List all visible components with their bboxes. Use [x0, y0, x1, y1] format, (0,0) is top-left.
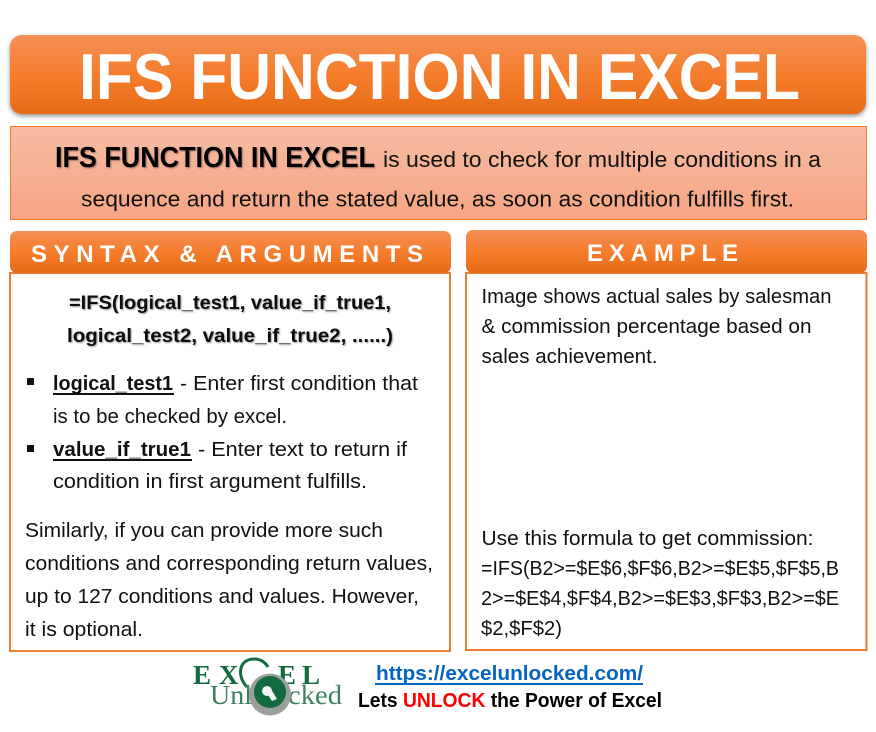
definition panel: is used to check for multiple conditions in a — [383, 147, 822, 172]
example formula text: $2,$F$2) — [481, 618, 562, 640]
title banner: IFS FUNCTION IN EXCEL — [79, 40, 800, 113]
argument bullet: value_if_true1: - Enter text to return if — [198, 439, 407, 461]
example heading — [466, 230, 867, 273]
logo: Excel Unlocked: Unl — [210, 680, 252, 710]
note text: Similarly, if you can provide more such — [25, 520, 383, 542]
argument bullet: logical_test1: logical_test1 — [53, 373, 173, 395]
example formula text: Use this formula to get commission: — [482, 528, 814, 550]
tagline: Lets UNLOCK the Power of Excel — [358, 690, 662, 712]
argument bullet: value_if_true1: condition in first argument fulfills. — [53, 471, 367, 493]
example heading: EXAMPLE — [587, 240, 738, 267]
argument bullet: logical_test1: is to be checked by excel. — [53, 406, 287, 428]
definition panel: sequence and return the stated value, as soon as condition fulfills first. — [81, 186, 794, 212]
definition panel: IFS FUNCTION IN EXCEL — [55, 142, 375, 174]
example intro text: & commission percentage based on — [482, 316, 812, 338]
example panel body — [466, 273, 866, 650]
syntax panel body — [10, 273, 450, 651]
syntax formula: =IFS(logical_test1, value_if_true1, — [69, 293, 391, 314]
logo: Excel Unlocked: cked — [288, 680, 343, 710]
logo: Excel Unlocked: X — [219, 660, 239, 690]
logo: Excel Unlocked: E — [278, 660, 296, 690]
argument bullet: logical_test1 — [27, 373, 418, 428]
syntax formula: logical_test2, value_if_true2, ......) — [67, 326, 393, 347]
note text: it is optional. — [25, 619, 143, 641]
syntax heading: SYNTAX & ARGUMENTS — [31, 241, 423, 268]
example intro text: sales achievement. — [482, 346, 658, 368]
example intro text — [482, 286, 832, 368]
argument bullet: logical_test1: - Enter first condition that — [180, 373, 418, 395]
note text — [25, 520, 433, 641]
syntax formula — [67, 293, 393, 347]
argument bullet: value_if_true1: value_if_true1 — [53, 439, 191, 461]
logo: Excel Unlocked: E — [193, 660, 211, 690]
example formula text: 2>=$E$4,$F$4,B2>=$E$3,$F$3,B2>=$E — [481, 588, 839, 610]
note text: up to 127 conditions and values. However, — [25, 586, 419, 608]
logo: Excel Unlocked: L — [302, 660, 320, 690]
example formula text — [481, 528, 839, 640]
argument bullet: value_if_true1 — [27, 439, 407, 493]
website link: https://excelunlocked.com/ — [376, 662, 643, 685]
definition panel — [10, 126, 866, 220]
panel: example — [466, 230, 867, 650]
panel: syntax and arguments — [10, 231, 451, 651]
note text: conditions and corresponding return values, — [25, 553, 433, 575]
example formula text: =IFS(B2>=$E$6,$F$6,B2>=$E$5,$F$5,B — [481, 558, 839, 580]
syntax heading — [10, 231, 451, 273]
logo: Excel Unlocked — [193, 659, 343, 716]
example intro text: Image shows actual sales by salesman — [482, 286, 832, 308]
